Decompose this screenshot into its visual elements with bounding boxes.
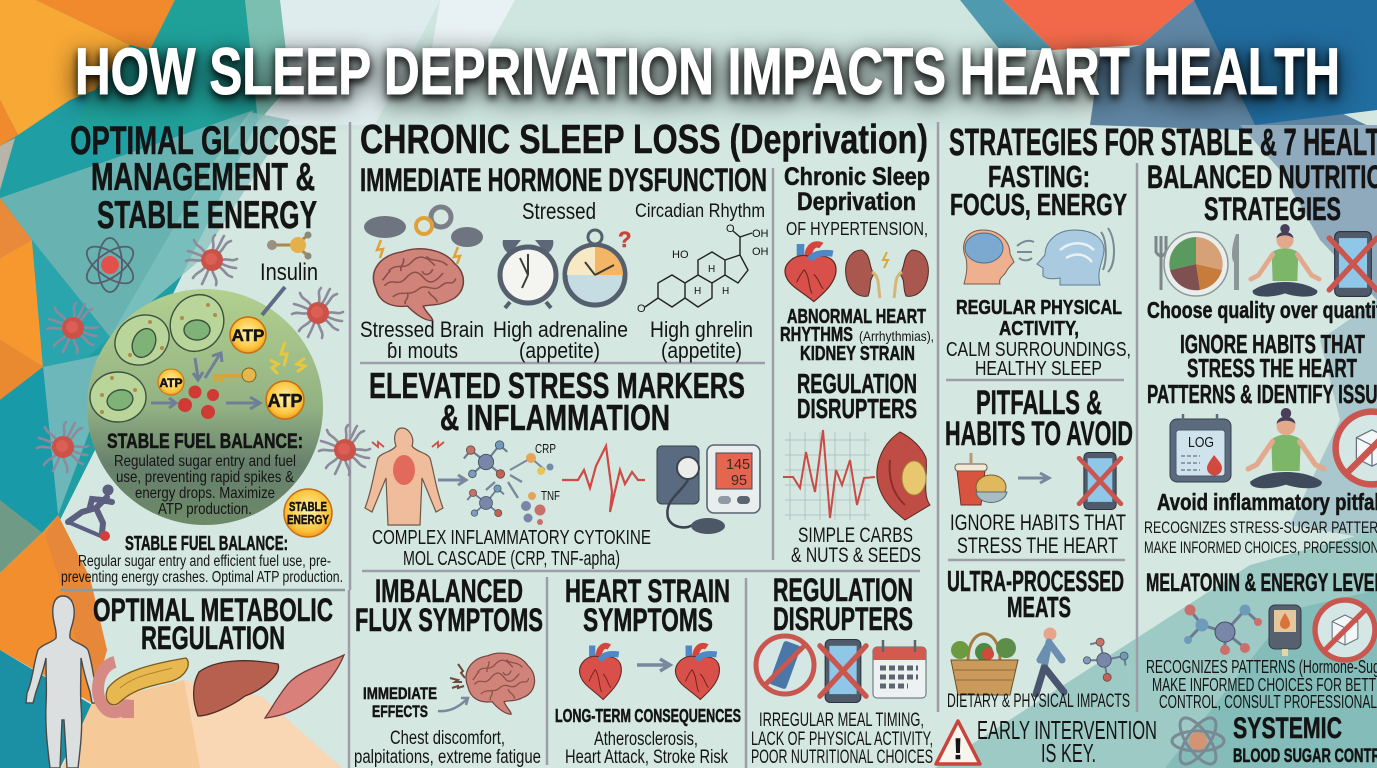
chart: ECG pulse xyxy=(562,446,645,512)
icon: stressed brain with clouds xyxy=(364,207,483,321)
caption: irregular meal timing xyxy=(751,710,933,768)
icon: no sugar cubes xyxy=(1315,600,1375,660)
heading: regulation disrupters xyxy=(797,368,917,424)
text: early intervention is key: EARLY INTERVENTION xyxy=(977,715,1157,745)
heading: elevated stress markers: ELEVATED STRESS MARKERS xyxy=(369,365,745,406)
icon: spiky cell left xyxy=(47,303,98,353)
icon: calendar xyxy=(873,640,926,698)
caption: ignore habits xyxy=(950,510,1126,558)
icon: pain bolts xyxy=(450,664,465,688)
icon: alarm clock xyxy=(500,240,556,308)
icon: muscle xyxy=(265,655,344,718)
heading: ultra-processed meats xyxy=(947,566,1124,624)
icon: phone crossed xyxy=(1079,452,1121,510)
panel: regulation disrupters bottom xyxy=(751,572,933,768)
caption: dietary and physical impacts: DIETARY & PHYSICAL IMPACTS xyxy=(947,691,1130,712)
icon: steroid structure: O xyxy=(726,223,735,235)
heading: regulation disrupters: REGULATION xyxy=(773,572,913,608)
icon: artery plaque xyxy=(877,432,930,520)
icon: TNF cluster: TNF xyxy=(541,488,560,503)
arrows xyxy=(151,353,260,409)
panel: strategies xyxy=(945,122,1377,712)
icon: hormone molecule xyxy=(1184,604,1262,655)
panel: balanced nutrition strategies xyxy=(1144,159,1377,712)
caption: high ghrelin: (appetite) xyxy=(661,338,742,363)
panel: early intervention xyxy=(936,715,1157,768)
icon: steroid structure: HO xyxy=(672,249,689,261)
heading: elevated stress markers xyxy=(369,365,745,438)
caption: regular physical activity: HEALTHY SLEEP xyxy=(975,358,1102,380)
icon: key xyxy=(214,376,243,382)
icon: knife xyxy=(1232,234,1239,290)
caption: stressed brain: Stressed Brain xyxy=(360,317,484,342)
heading: elevated stress markers: & INFLAMMATION xyxy=(440,397,670,438)
icon: spiky cell lower left xyxy=(37,422,88,472)
heading: imbalanced flux symptoms: FLUX SYMPTOMS xyxy=(355,602,543,638)
icon: stable energy badge xyxy=(284,489,332,537)
icon: stable energy badge: ENERGY xyxy=(287,512,329,527)
icon: key bow xyxy=(242,368,256,382)
caption: abnormal heart rhythms: KIDNEY STRAIN xyxy=(800,343,915,365)
icon: human body xyxy=(26,596,99,768)
icon: brain xyxy=(466,653,535,714)
caption: irregular meal timing: LACK OF PHYSICAL ACTIVITY, xyxy=(751,729,933,750)
heading: ultra-processed meats: MEATS xyxy=(1007,592,1071,624)
caption: stressed brain xyxy=(360,317,484,363)
icon: glucose log: LOG xyxy=(1188,434,1214,451)
icon: walking person xyxy=(1036,628,1064,694)
panel: chronic sleep loss xyxy=(360,116,928,570)
heading: pitfalls and habits to avoid: HABITS TO AVOID xyxy=(945,415,1133,453)
icon: ATP badges xyxy=(158,317,304,419)
icon: question mark: ? xyxy=(618,227,631,252)
icon: TNF cluster xyxy=(521,488,560,525)
label: immediate effects: EFFECTS xyxy=(372,702,428,721)
label: long-term consequences: LONG-TERM CONSEQUENCES xyxy=(555,706,741,726)
chart: stable fuel circle xyxy=(87,285,323,525)
heading: chronic sleep deprivation: Deprivation xyxy=(797,188,916,216)
icon: stable energy badge: STABLE xyxy=(289,499,327,514)
icon: insulin pointer xyxy=(262,287,285,315)
panel: imbalanced flux symptoms xyxy=(354,573,543,768)
glucose dots xyxy=(178,386,219,419)
text: stable fuel balance: STABLE FUEL BALANCE: xyxy=(107,430,303,453)
panel: chronic sleep deprivation sidebar xyxy=(780,163,934,567)
caption: regular physical activity: ACTIVITY, xyxy=(999,318,1079,340)
caption: ignore habits: IGNORE HABITS THAT xyxy=(950,510,1126,535)
caption: high adrenaline: High adrenaline xyxy=(493,317,628,342)
heading: regulation disrupters: DISRUPTERS xyxy=(797,393,917,424)
icon: steroid structure: H xyxy=(722,286,729,297)
icon: plate of food xyxy=(1164,232,1228,296)
heading: optimal glucose management xyxy=(70,119,337,237)
text: stable fuel balance: use, preventing rapid spikes & xyxy=(116,469,294,486)
icon: steroid structure: OH xyxy=(752,246,769,258)
caption: regular physical activity: CALM SURROUNDINGS, xyxy=(946,339,1131,361)
label: insulin: Insulin xyxy=(260,259,318,286)
panel: heart strain symptoms xyxy=(555,573,741,768)
label: stressed: Stressed xyxy=(522,198,596,224)
caption: abnormal heart rhythms xyxy=(780,306,934,365)
caption: atherosclerosis xyxy=(565,729,728,768)
label: immediate effects xyxy=(363,684,437,721)
caption: atherosclerosis: Atherosclerosis, xyxy=(594,729,698,750)
caption: inflammatory cytokine cascade xyxy=(372,527,651,570)
heading: optimal glucose management: STABLE ENERGY xyxy=(97,194,317,237)
icon: atom xyxy=(1172,713,1224,768)
panel: dividers xyxy=(60,122,1137,768)
heading: regulation disrupters xyxy=(773,572,913,637)
icon: runner xyxy=(68,484,114,541)
panel: optimal glucose management xyxy=(26,119,370,768)
icon: cytokine molecule top xyxy=(464,441,507,478)
arrow: heart progression xyxy=(637,659,670,671)
icon: meditating person xyxy=(1251,224,1319,297)
icon: molecule xyxy=(1078,631,1132,684)
icon: pancreas xyxy=(98,658,188,718)
heading: optimal metabolic regulation xyxy=(93,592,333,656)
caption: irregular meal timing: POOR NUTRITIONAL CHOICES xyxy=(751,747,933,768)
icon: phone crossed xyxy=(820,640,866,702)
caption: recognizes stress-sugar patterns xyxy=(1144,518,1377,557)
arrow: habits xyxy=(1018,473,1049,483)
icon: soda and bowl xyxy=(955,453,1007,505)
heading: chronic sleep deprivation xyxy=(784,163,930,216)
caption: abnormal heart rhythms: (Arrhythmias), xyxy=(859,328,934,344)
caption: high ghrelin xyxy=(650,317,753,363)
heading: ultra-processed meats: ULTRA-PROCESSED xyxy=(947,566,1124,598)
icon: CRP molecule xyxy=(510,441,556,475)
heading: heart strain symptoms: SYMPTOMS xyxy=(583,602,713,638)
icon: blood pressure monitor: 95 xyxy=(731,472,747,489)
label: circadian rhythm: Circadian Rhythm xyxy=(635,201,765,222)
text: stable fuel balance secondary: STABLE FUEL BALANCE: xyxy=(125,533,288,555)
icon: body with inflamed chest xyxy=(365,428,444,525)
heading: optimal glucose management: OPTIMAL GLUCOSE xyxy=(70,119,337,163)
caption: high adrenaline xyxy=(493,317,628,363)
arrow: effects to brain xyxy=(438,698,468,711)
icon: ATP badges: ATP xyxy=(159,376,183,390)
text: stable fuel balance secondary: preventing energy crashes. Optimal ATP production. xyxy=(61,569,343,586)
text: stable fuel balance secondary xyxy=(61,533,343,586)
cells xyxy=(90,285,234,422)
text: stable fuel balance: Regulated sugar entry and fuel xyxy=(114,453,296,470)
heading: imbalanced flux symptoms xyxy=(355,573,543,638)
caption: simple carbs: SIMPLE CARBS xyxy=(798,524,913,547)
text: early intervention is key: IS KEY. xyxy=(1041,738,1096,768)
caption: abnormal heart rhythms: ABNORMAL HEART xyxy=(787,306,926,328)
icon: no sugar cubes xyxy=(1336,412,1377,484)
icon: no energy drink xyxy=(756,636,814,694)
caption: abnormal heart rhythms: RHYTHMS xyxy=(780,324,853,346)
icon: steroid structure: H xyxy=(708,264,715,275)
caption: regular physical activity xyxy=(946,297,1131,380)
icon: blood pressure monitor: 145 xyxy=(726,456,750,473)
icon: blood pressure monitor xyxy=(707,445,760,513)
icon: ATP badges: ATP xyxy=(268,391,302,411)
heading: fasting focus energy: FASTING: xyxy=(988,159,1090,194)
icon: steroid structure: O xyxy=(637,303,646,315)
heading: chronic sleep loss: CHRONIC SLEEP LOSS (Deprivation) xyxy=(360,116,928,162)
icon: kidneys xyxy=(846,250,928,298)
caption: inflammatory cytokine cascade: MOL CASCADE (CRP, TNF-apha) xyxy=(403,548,620,570)
icon: meditating person xyxy=(1248,408,1324,488)
icon: spiky cell top xyxy=(186,235,237,285)
heading: optimal metabolic regulation: REGULATION xyxy=(141,620,285,656)
heading: heart strain symptoms: HEART STRAIN xyxy=(565,573,730,609)
caption: stressed brain: ɓı mouts xyxy=(387,338,458,363)
icon: spiky cell far right xyxy=(319,425,370,475)
text: early intervention is key xyxy=(977,715,1157,768)
heading: ignore habits xyxy=(1147,329,1377,409)
icon: cytokine molecule bottom xyxy=(467,485,504,517)
icon: insulin molecule xyxy=(267,232,312,260)
caption: recognizes patterns xyxy=(1146,657,1377,712)
heading: regulation disrupters: DISRUPTERS xyxy=(773,601,913,637)
heading: chronic sleep deprivation: Chronic Sleep xyxy=(784,163,930,191)
icon: focused heads xyxy=(964,228,1114,285)
icon: phone crossed xyxy=(1329,232,1377,296)
text: stable fuel balance xyxy=(107,430,303,518)
icon: stopwatch xyxy=(565,230,625,305)
heading: regulation disrupters: REGULATION xyxy=(797,368,917,399)
icon: CRP molecule: CRP xyxy=(535,441,556,456)
panel: systemic blood sugar control xyxy=(1172,712,1377,768)
icon: healthy heart xyxy=(580,646,621,700)
icon: steroid structure: H xyxy=(694,286,701,297)
icon: energy bolts xyxy=(270,342,305,374)
heading: immediate hormone dysfunction: IMMEDIATE HORMONE DYSFUNCTION xyxy=(360,162,767,198)
caption: simple carbs: & NUTS & SEEDS xyxy=(791,544,921,567)
icon: ATP badges: ATP xyxy=(232,326,264,345)
caption: of hypertension: OF HYPERTENSION, xyxy=(786,219,928,239)
heading: optimal metabolic regulation: OPTIMAL METABOLIC xyxy=(93,592,333,628)
caption: chest discomfort xyxy=(354,728,541,768)
heading: fasting focus energy: FOCUS, ENERGY xyxy=(950,187,1127,222)
heading: heart strain symptoms xyxy=(565,573,730,638)
caption: chest discomfort: palpitations, extreme fatigue xyxy=(354,747,541,768)
heading: imbalanced flux symptoms: IMBALANCED xyxy=(375,573,523,609)
heading: pitfalls and habits to avoid: PITFALLS & xyxy=(976,384,1102,422)
heading: optimal glucose management: MANAGEMENT & xyxy=(91,156,315,199)
icon: steroid structure: OH xyxy=(752,228,769,240)
caption: high adrenaline: (appetite) xyxy=(519,338,600,363)
text: stable fuel balance: ATP production. xyxy=(158,501,252,518)
icon: spiky cell right xyxy=(292,288,343,338)
icon: glucose meter xyxy=(1269,605,1301,656)
heading: fasting focus energy xyxy=(950,159,1127,222)
chart: ECG grid xyxy=(783,430,875,520)
icon: liver xyxy=(194,661,279,716)
heading: pitfalls and habits to avoid xyxy=(945,384,1133,453)
label: immediate effects: IMMEDIATE xyxy=(363,684,437,703)
caption: simple carbs xyxy=(791,524,921,567)
icon: warning triangle xyxy=(936,721,980,766)
arrow: to cytokines xyxy=(438,475,466,485)
icon: atom xyxy=(81,238,139,292)
caption: high ghrelin: High ghrelin xyxy=(650,317,753,342)
caption: ignore habits: STRESS THE HEART xyxy=(957,533,1118,558)
caption: regular physical activity: REGULAR PHYSICAL xyxy=(956,297,1122,319)
icon: warning triangle: ! xyxy=(953,733,963,766)
icon: blood pressure cuff xyxy=(657,446,725,534)
icon: strained heart xyxy=(675,646,719,700)
caption: chest discomfort: Chest discomfort, xyxy=(390,728,505,749)
caption: atherosclerosis: Heart Attack, Stroke Risk xyxy=(565,747,728,768)
icon: heart xyxy=(785,244,836,302)
text: stable fuel balance secondary: Regular sugar entry and efficient fuel use, pre- xyxy=(78,553,331,570)
heading: balanced nutrition strategies xyxy=(1147,159,1377,227)
caption: inflammatory cytokine cascade: COMPLEX INFLAMMATORY CYTOKINE xyxy=(372,527,651,549)
icon: fork xyxy=(1156,236,1166,290)
arrows: cascade xyxy=(486,475,522,498)
icon: steroid structure xyxy=(637,223,769,315)
icon: vegetable basket xyxy=(951,634,1018,695)
caption: irregular meal timing: IRREGULAR MEAL TIMING, xyxy=(759,710,924,731)
text: stable fuel balance: energy drops. Maximize xyxy=(135,485,275,502)
icon: glucose log xyxy=(1170,414,1231,482)
